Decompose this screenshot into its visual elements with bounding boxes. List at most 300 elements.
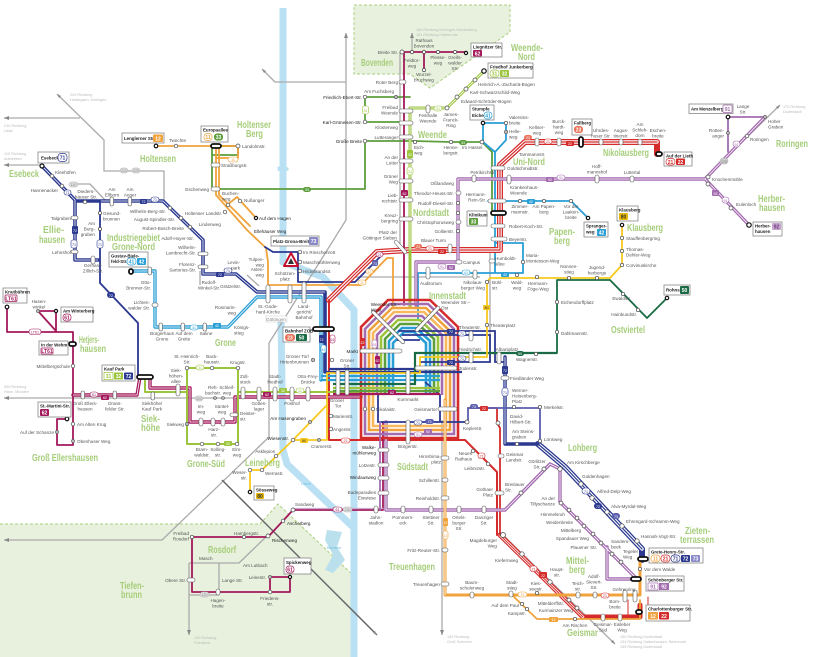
stop names north and centre: mühlenweg xyxy=(352,450,376,456)
stop names north and centre: Helle- xyxy=(509,129,521,134)
stop names west: Grätzelstr. xyxy=(220,284,241,289)
route number badges on lines: 92 xyxy=(548,178,552,182)
route number badges on lines: 23 xyxy=(526,136,530,140)
stop names west: Groner xyxy=(330,398,344,403)
stop names west: August-Spindler-Str. xyxy=(134,217,175,222)
district names: Grone-Nord xyxy=(112,241,155,253)
stop names north and centre: Theodor-Heuss-Str. xyxy=(414,191,454,196)
stop names south-east: Landstr. xyxy=(506,458,522,462)
stop names north and centre: Eich- xyxy=(414,145,424,150)
stop names west: Am xyxy=(88,221,95,226)
stop names west: Siekhöhe/ xyxy=(142,401,162,406)
legend boxes: terminals with line numbers: Am Menzelberg xyxy=(691,106,724,112)
stop names north and centre: Beyerstr. xyxy=(509,237,527,242)
stop names west: Auf dem Hagen xyxy=(259,216,291,221)
route number badges on lines: 21 xyxy=(344,439,348,443)
stop names west: Obenhuser Weg xyxy=(77,439,111,444)
legend boxes: terminals with line numbers: LT61 xyxy=(41,349,53,355)
stop names north and centre: Humboldt- xyxy=(495,256,516,261)
stop names west: Hambergstr. xyxy=(234,531,259,536)
route number badges on lines: 33 xyxy=(461,141,465,145)
district names: Grone-Süd xyxy=(187,458,225,470)
district names: terrassen xyxy=(680,534,714,546)
stop names south-east: Am Rischen xyxy=(563,623,588,628)
stop names north and centre: Montessori-Weg xyxy=(526,258,560,264)
route number badges on lines: 21 xyxy=(603,594,607,598)
stop names south-east: Treuenhagen xyxy=(413,582,440,587)
stop names south-east: Am Steins- xyxy=(512,429,534,434)
stop names north and centre: dorn xyxy=(635,133,645,138)
regional bus direction labels: Uslar xyxy=(4,129,14,133)
lines 11 and 12 orange west xyxy=(156,146,393,307)
district names: Leineberg xyxy=(245,457,280,469)
route number badges on lines: 42 xyxy=(215,324,219,328)
route number badges on lines: 11 xyxy=(360,281,364,285)
stop names north and centre: Rathaus xyxy=(415,38,433,43)
stop names north and centre: Robert-Koch-Str. xyxy=(509,224,543,229)
stop names north and centre: An der xyxy=(384,155,398,160)
route number badges on lines: 62 xyxy=(265,393,269,397)
stop names west: Siek- xyxy=(171,368,181,373)
stop names west: Weser- xyxy=(232,470,247,475)
legend boxes: terminals with line numbers: Stumpfe xyxy=(472,106,490,112)
legend boxes: terminals with line numbers: Auf der Lieth xyxy=(666,154,693,158)
stop names west: Cramerstr. xyxy=(311,444,332,449)
stop names west: Tulpen- xyxy=(249,257,264,262)
stop names west: Gesund- xyxy=(103,211,121,216)
stop names north and centre: Valentins- xyxy=(509,115,529,120)
stop names west: Kleehöfen xyxy=(55,170,76,175)
stop names west: Land- xyxy=(298,304,310,309)
route number badges on lines: 220 xyxy=(133,169,139,173)
stop names north and centre: Weg xyxy=(389,180,398,184)
stop names south-east: Platz xyxy=(483,492,494,498)
route number badges on lines: 71 xyxy=(72,243,76,247)
route number badges on lines: 41 xyxy=(192,326,196,330)
district names: Südstadt xyxy=(397,461,428,473)
stop names south-east: Adolf- xyxy=(588,574,600,579)
line 33 green xyxy=(212,97,492,215)
legend boxes: terminals with line numbers: 22 xyxy=(678,160,683,166)
stop names west: Otto-Frey- xyxy=(298,374,318,379)
stop names west: Eschenweg xyxy=(185,187,209,192)
route number badges on lines: 71 xyxy=(153,198,157,202)
route number badges on lines: 12 xyxy=(552,618,556,622)
legend boxes: terminals with line numbers: LT61 xyxy=(5,296,17,302)
stop names south-east: Fritz-Reuter-Str. xyxy=(407,548,440,553)
district names: Ellie- xyxy=(43,224,64,236)
horizontal city bundle xyxy=(321,353,557,394)
legend boxes: terminals with line numbers: Bahnhof ZOB xyxy=(285,328,313,334)
stop names south-east: Alva-Myrdal-Weg xyxy=(611,504,647,509)
route number badges on lines: 61 xyxy=(92,393,96,397)
route number badges on lines: 23 xyxy=(416,245,420,249)
legend boxes: terminals with line numbers: 23 xyxy=(287,336,293,342)
route number badges on lines: 71 xyxy=(416,421,420,425)
stop names south-east: str. xyxy=(575,586,581,592)
stop names south-east: Kampstr. xyxy=(508,611,526,616)
regional bus direction labels: 120 Richtung xyxy=(194,636,216,640)
stop names north and centre: Jahn- xyxy=(370,515,382,520)
stop names west: Straßburgstr. xyxy=(221,163,248,168)
stop names north and centre: Platz der xyxy=(379,230,397,235)
district names: Holtenser xyxy=(237,119,271,131)
stop names north and centre: anger xyxy=(712,134,724,138)
stop names north and centre: West xyxy=(371,308,382,312)
route number badges on lines: 73 xyxy=(428,420,432,424)
stop names west: höhen- xyxy=(169,374,184,378)
stop names south-east: Schillerstr. xyxy=(419,478,440,483)
stop names west: hausstr. xyxy=(204,360,220,364)
stop names north and centre: Str. xyxy=(456,526,462,531)
legend boxes: terminals with line numbers: Klinikum xyxy=(469,212,488,218)
stop names north and centre: Am Fuchsberg xyxy=(364,89,394,94)
stop names west: Lambrecht-Str. xyxy=(166,250,196,256)
stop names north and centre: bruchweg xyxy=(414,78,434,82)
regional bus direction labels: 110 Richtung xyxy=(4,152,26,156)
stop names west: Göttingen xyxy=(266,317,286,322)
stop names north and centre: Oßlandweg xyxy=(430,181,454,186)
stop names north and centre: Laaken- xyxy=(563,210,580,214)
route number badges on lines: 61 xyxy=(330,338,334,342)
route number badges on lines: 72 xyxy=(596,505,600,509)
route number badges on lines: 72 xyxy=(109,294,113,298)
legend boxes: terminals with line numbers: 91 xyxy=(650,584,656,590)
stop names south-east: beek xyxy=(611,544,622,550)
stop names south-east: Am Kirschberge xyxy=(567,460,600,465)
stop names west: str. xyxy=(215,452,221,458)
route number badges on lines: 21 xyxy=(532,568,536,572)
stop names north and centre: Luttertal xyxy=(624,170,640,175)
district names: Lohberg xyxy=(568,442,597,454)
stop names north and centre: Ring xyxy=(446,123,456,128)
stop names north and centre: weg xyxy=(434,60,443,66)
stop names north and centre: Eschen- xyxy=(650,128,666,133)
stop names west: Freibad xyxy=(173,531,189,536)
legend boxes: terminals with line numbers: 80 xyxy=(257,494,263,500)
legend boxes: terminals with line numbers: 31 xyxy=(492,72,497,78)
route number badges on lines: 91 xyxy=(724,199,728,203)
stop names south-east: Guldenhagen xyxy=(582,474,610,479)
stop names north and centre: Friedrichstr. xyxy=(458,347,482,352)
district names: Holtensen xyxy=(140,153,176,165)
stop names north and centre: Edward-Schröder-Bogen xyxy=(461,99,512,104)
stop names west: Lichten- xyxy=(134,300,150,305)
background areas: Bovenden and Rosdorf xyxy=(0,5,510,657)
stop names west: Am Lutbach xyxy=(243,563,268,568)
stop names north and centre: Grüner xyxy=(384,174,398,179)
stop names north and centre: weg xyxy=(408,64,417,68)
route number badges on lines: 31 xyxy=(364,109,368,113)
stop names west: Gottes- xyxy=(251,401,267,406)
district names: hausen xyxy=(80,343,106,355)
stop names south-east: Neues xyxy=(459,451,472,456)
stop names west: Mittelbergschule xyxy=(37,364,70,369)
route number badges on lines: 50 xyxy=(518,352,522,356)
route number badges on lines: 22 xyxy=(541,574,545,578)
stop names west: Wiesenstr. xyxy=(268,436,289,441)
stop names west: stieg xyxy=(234,330,244,336)
legend boxes: terminals with line numbers: St.-Martini-Str. xyxy=(40,404,70,408)
legend boxes: terminals with line numbers: 23 xyxy=(576,128,581,134)
stop names south-east: Mittelberg xyxy=(561,528,581,533)
stop names north and centre: mannshof xyxy=(587,170,608,174)
stop names south-east: Reinholdstr. xyxy=(416,496,440,501)
stop names west: Saline xyxy=(200,331,213,336)
legend boxes: terminals with line numbers: 92 xyxy=(661,584,667,590)
line 80 yellow xyxy=(250,225,622,492)
legend boxes: terminals with line numbers: 62 xyxy=(475,52,480,58)
stop names north and centre: huser Str. xyxy=(591,134,611,138)
navy south-east triple bundle xyxy=(468,357,642,560)
legend boxes: terminals with line numbers: Fallberg xyxy=(574,120,591,126)
stop names north and centre: Bühl- xyxy=(492,280,503,285)
stop names north and centre: weg xyxy=(414,150,423,156)
district names: hausen xyxy=(39,234,65,246)
stop names south-east xyxy=(301,376,680,632)
legend boxes: terminals with line numbers: 92 xyxy=(774,224,779,230)
stop names west: Zoll- xyxy=(240,374,249,379)
legend boxes: terminals with line numbers: feld-Str. xyxy=(111,259,127,264)
stop names south-east: stieg xyxy=(507,586,517,590)
regional bus direction labels: 210 Richtung xyxy=(4,124,26,128)
district names: Nordstadt xyxy=(413,207,449,219)
stop names north and centre: Badeparadies xyxy=(348,490,376,495)
stop names south-east: schulenweg xyxy=(460,586,485,590)
line 11 12 orange south-east xyxy=(445,400,640,619)
district names: Nikolausberg xyxy=(603,147,649,159)
district names: Treuenhagen xyxy=(389,561,435,573)
regional bus direction labels: Friedland xyxy=(194,641,210,645)
stop names north and centre: Burck- xyxy=(552,119,566,124)
district names: hausen xyxy=(759,202,785,214)
stop names south-east: Merkelstr. xyxy=(544,405,564,410)
stop names north and centre: Nikolaus- xyxy=(463,280,483,285)
route number badges on lines: 11 xyxy=(521,593,524,597)
stop names north and centre: Christophorusweg xyxy=(417,220,454,225)
stop names west: Marienstr. xyxy=(333,414,353,419)
stop names north and centre: Krankenhaus- xyxy=(510,185,539,190)
stop names north and centre: Hoher xyxy=(768,119,781,124)
legend boxes: terminals with line numbers: 42 xyxy=(139,260,144,266)
stop names west: Grone xyxy=(156,336,169,342)
stop names north and centre: Bovenden xyxy=(414,44,435,48)
stop names north and centre: berger Weg xyxy=(461,286,485,290)
stop names north and centre: Lotzestr. xyxy=(359,463,376,468)
stop names west: Str. xyxy=(184,360,190,364)
stop names west: Adolf-Hoyer-Str. xyxy=(161,236,194,241)
stop names west xyxy=(20,138,355,608)
legend boxes: terminals with line numbers: In der Wehm xyxy=(41,342,67,348)
stop names south-east: Himmelsruh xyxy=(540,512,565,517)
stop names south-east: Kiessee xyxy=(327,545,342,550)
stop names west: Leinestr. xyxy=(249,575,266,580)
stop names west: Wilhelm- xyxy=(178,245,196,250)
stop names south-east: Baum- xyxy=(465,580,479,585)
stop names south-east: seestr. xyxy=(529,586,543,592)
stop names west: Zillich-Str. xyxy=(83,268,103,274)
legend boxes: terminals with line numbers: 32 xyxy=(116,374,121,380)
legend boxes: terminals with line numbers: 80 xyxy=(621,214,626,220)
stop names west: weg xyxy=(256,262,264,268)
legend boxes: terminals with line numbers: 11 xyxy=(653,556,658,562)
stop names south-east: Hiroshima- xyxy=(419,454,441,459)
stop names west: Schützen- xyxy=(275,271,295,276)
stop names north and centre: Weender Str.– xyxy=(441,300,470,305)
stop names north and centre: weg xyxy=(533,130,542,136)
stop names north and centre: weg xyxy=(509,134,518,140)
stop names south-east: Kies- xyxy=(531,581,541,586)
legend boxes: terminals with line numbers: Eiche xyxy=(472,113,484,118)
stop names west: Am Alten Krug xyxy=(77,422,107,427)
legend boxes: terminals with line numbers: 21 xyxy=(663,556,668,562)
stop names south-east: Lönsweg xyxy=(544,437,563,442)
stop names south-east: Str. xyxy=(534,464,540,470)
stop names north and centre: Ewaldstr. xyxy=(612,296,631,301)
district names: Weende- xyxy=(511,42,543,54)
stop names north and centre: Theaterstr. xyxy=(459,325,481,330)
regional bus direction labels: Groß Schneen xyxy=(447,640,472,644)
stop names south-east: Breslauer xyxy=(505,482,525,487)
stop names south-east: Kiefernweg xyxy=(495,558,518,563)
regional bus direction labels: 300 Richtung xyxy=(4,385,26,389)
regional bus direction labels: 140 Richtung xyxy=(447,635,469,639)
stop names west: Hagen- xyxy=(210,598,226,603)
stop names north and centre: breite xyxy=(565,215,577,220)
legend boxes: terminals with line numbers: 61 xyxy=(287,568,293,574)
stop names south-east: Tillyschanze xyxy=(530,502,555,506)
stop names north and centre: Tammannstr. xyxy=(519,152,545,157)
regional bus direction labels: Duderstadt xyxy=(783,110,803,114)
stop names west: Im- xyxy=(198,404,204,409)
district names: höhe xyxy=(141,422,160,434)
stop names west: Stadt- xyxy=(269,374,281,379)
stop names south-east: Weg xyxy=(488,544,497,548)
stop names south-east: Ehrengard-Schramm-Weg xyxy=(626,519,680,524)
route number badges on lines: 92 xyxy=(714,192,718,196)
stop names north and centre: allee xyxy=(495,262,505,266)
legend boxes: terminals with line numbers: Klausberg xyxy=(619,208,641,212)
district names: Groß Ellershausen xyxy=(32,452,98,464)
stop names west: Lindenweg xyxy=(199,222,221,227)
route number badges on lines: 72 xyxy=(449,361,453,365)
route number badges on lines: 21 xyxy=(480,454,484,458)
district names: Berg xyxy=(246,128,263,140)
district names: Innenstadt xyxy=(429,290,466,302)
stop names north and centre: Zimmer- xyxy=(511,204,529,209)
stop names west: friedhof xyxy=(267,380,283,384)
route number badges on lines: 71 xyxy=(460,357,464,361)
route number badges on lines: 31 xyxy=(298,389,302,393)
stop names west: Solling- xyxy=(210,447,226,452)
stop names west: weg xyxy=(218,410,227,414)
stop names west: Bahnhof xyxy=(295,315,313,320)
stop names north and centre: Lieb- xyxy=(388,193,398,198)
stop names south-east: Born- xyxy=(609,599,621,604)
legend boxes: terminals with line numbers: 61 xyxy=(64,316,70,322)
stop names west: stock xyxy=(240,380,251,384)
legend boxes: terminals with line numbers: 71 xyxy=(673,556,678,562)
stop names north and centre: herberge xyxy=(588,270,607,276)
route number badges on lines: 130 xyxy=(344,508,350,512)
legend boxes: terminals with line numbers: Herber- xyxy=(755,224,771,228)
stop names north and centre: Plesse- xyxy=(430,55,446,60)
route number badges on lines: 72 xyxy=(449,330,453,334)
stop names north and centre: Klosterweg xyxy=(375,125,398,130)
district names: Bovenden xyxy=(361,57,393,69)
stop names south-east: Vor dem Walde xyxy=(644,567,676,572)
stop names north and centre: Knochenmühle xyxy=(712,177,743,182)
lines 41 42 blue xyxy=(131,123,588,380)
stop names north and centre: Corvinuskirche xyxy=(626,263,657,268)
stop names north and centre: berg xyxy=(539,210,549,214)
district names: berg xyxy=(554,235,570,247)
route number badges on lines: 31 xyxy=(408,170,412,174)
stop names south-east: Süd xyxy=(599,628,608,632)
stop names west: Twechte xyxy=(169,138,187,143)
regional bus direction labels: 220 Richtung xyxy=(70,93,92,97)
stop names north and centre: Lutter xyxy=(386,160,398,166)
route number badges on lines: 22 xyxy=(568,142,572,146)
stop names west: gericht/ xyxy=(296,310,312,314)
route number badges on lines: 72 xyxy=(503,369,507,373)
legend boxes: terminals with line numbers: 72 xyxy=(126,374,131,380)
stop names north and centre: Albaniplatz xyxy=(496,347,519,352)
stop names north and centre: Vor der xyxy=(564,204,578,209)
stop names west: park xyxy=(231,266,241,270)
legend boxes: terminals with line numbers: Grete-Henry-Str. xyxy=(651,550,685,554)
stop names north and centre: Str. xyxy=(740,110,746,114)
district names: brunn xyxy=(121,589,142,601)
regional bus direction labels: 150 Richtung Duderstadt xyxy=(620,635,662,639)
stop names north and centre: Blauer Turm xyxy=(421,238,446,243)
stop names west: Harz- xyxy=(208,427,220,432)
stop names west: Brenner-Str. xyxy=(126,286,151,290)
stop names west: Sartorius-Str. xyxy=(169,268,196,272)
stop names north and centre: Karl-Grüneisen-Str. xyxy=(323,120,362,125)
route number badges on lines: 71 xyxy=(98,243,102,247)
stop names north and centre: Große Breite xyxy=(336,139,362,144)
stop names west: Rudolf- xyxy=(202,280,216,285)
stop names south-east: Spandauer Weg xyxy=(556,536,589,541)
district names: Industriegebiet xyxy=(107,232,160,244)
stop names north and centre: Kreuz- xyxy=(384,213,398,218)
legend boxes: terminals with line numbers: 32 xyxy=(502,72,507,78)
stop names west: Auf dem xyxy=(175,331,193,336)
stop names west: weg xyxy=(233,452,242,458)
stop names south-east: str. xyxy=(554,572,560,578)
stop names south-east: Magdeburger xyxy=(470,538,497,543)
stop names west: Otto- xyxy=(141,280,151,285)
stop names south-east: Keplerstr. xyxy=(463,426,482,431)
stop names west: Str. xyxy=(344,364,350,368)
route number badges on lines: 33 xyxy=(305,188,309,192)
stop names north and centre: Ortels- xyxy=(452,515,466,520)
legend boxes: terminals with line numbers: Rohns xyxy=(666,288,680,292)
route number badges on lines: 80 xyxy=(484,306,488,310)
stop names north and centre: Gollierstr. xyxy=(435,229,454,234)
route number badges on lines: 42 xyxy=(529,200,533,204)
stop names south-east: platz xyxy=(431,460,442,464)
route number badges on lines: 32 xyxy=(281,389,285,393)
stop names west: Groß Ellers- xyxy=(73,401,97,406)
legend boxes: terminals with line numbers: 33 xyxy=(471,220,476,226)
stop names south-east: Friedländer Weg xyxy=(510,376,544,381)
stop names west: Deister- xyxy=(240,411,256,416)
maroon lines 61 62 xyxy=(7,52,466,592)
stop names west: Landolmstr. xyxy=(242,144,266,149)
stop names west: St.-Heinrich- xyxy=(174,354,200,359)
